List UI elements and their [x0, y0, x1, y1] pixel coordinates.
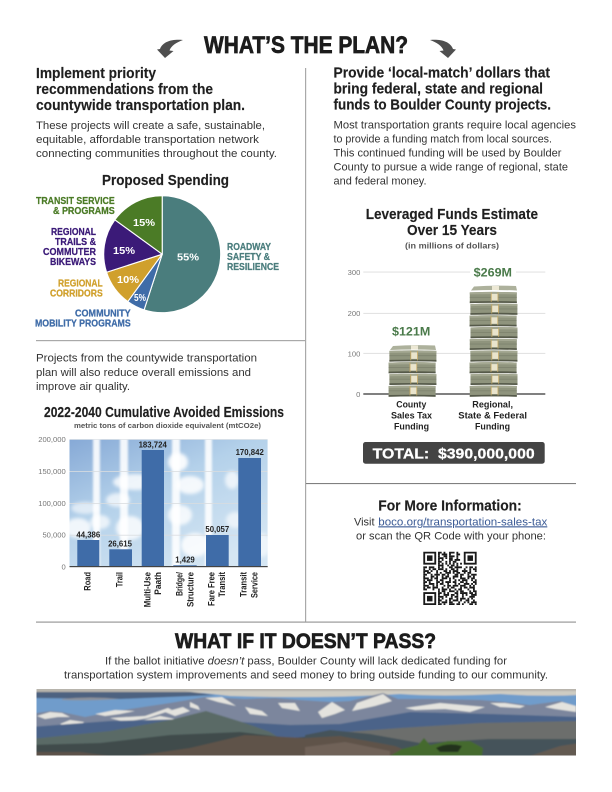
- x axis labels: Road: [83, 572, 93, 591]
- y axis labels: 100: [348, 349, 360, 358]
- heading: provide local-match dollars: [334, 66, 551, 114]
- text block: projects description: These projects will create a safe, sustainable,: [36, 120, 265, 132]
- bar values: 1,429: [175, 556, 195, 565]
- text block: grants description: Most transportation grants require local agencies: [334, 120, 576, 132]
- heading: provide local-match dollars: bring federal, state and regional: [334, 82, 543, 98]
- text block: grants description: to provide a funding match from local sources.: [334, 134, 552, 146]
- label: regional corridors: CORRIDORS: [50, 289, 103, 300]
- heading: proposed spending: Proposed Spending: [102, 173, 229, 189]
- total box: TOTAL: $390,000,000: [373, 446, 535, 462]
- pie chart: proposed spending: 55%: [177, 252, 200, 264]
- y axis labels: 50,000: [42, 531, 66, 540]
- title: WHAT’S THE PLAN?: [204, 32, 408, 59]
- label: community mobility: COMMUNITY: [75, 309, 131, 320]
- label: county sales tax funding: County: [396, 399, 427, 410]
- money stack: regional: [470, 286, 518, 397]
- y axis labels: 200: [348, 309, 360, 318]
- bar values: 44,386: [76, 530, 101, 539]
- text block: grants description: and federal money.: [334, 176, 426, 188]
- label: community mobility: MOBILITY PROGRAMS: [35, 319, 131, 330]
- label: regional trails: REGIONAL: [51, 227, 96, 238]
- y axis labels: 0: [61, 562, 66, 572]
- label: county sales tax funding: Funding: [394, 421, 429, 432]
- text block: consequence: [64, 656, 548, 682]
- text block: emissions description: Projects from the countywide transportation: [36, 353, 257, 365]
- text block: projects description: connecting communities throughout the county.: [36, 148, 277, 160]
- heading: cumulative avoided emissions: 2022-2040 Cumulative Avoided Emissions: [44, 405, 284, 421]
- label: regional state federal funding: Funding: [475, 421, 510, 432]
- label: roadway safety: RESILIENCE: [227, 262, 279, 273]
- grey-green peak: [30, 711, 290, 745]
- bars: [77, 450, 261, 567]
- bar values: 50,057: [205, 525, 229, 534]
- label: transit service: TRANSIT SERVICE: [36, 196, 115, 207]
- heading: leveraged funds estimate: Over 15 Years: [407, 223, 497, 239]
- text block: emissions description: [36, 353, 257, 393]
- y axis labels: 200,000: [38, 435, 66, 444]
- heading: leveraged funds estimate: [366, 207, 538, 251]
- panel: local-match dollars: [334, 66, 576, 464]
- text block: consequence: transportation system improvements and seed money to bring outside funding to our community.: [64, 670, 548, 682]
- slice: transit service 15%: [115, 196, 162, 254]
- slice: roadway safety 55%: [144, 196, 221, 313]
- panel: for more information: [354, 499, 548, 605]
- value: $121M: $121M: [392, 326, 430, 338]
- text block: grants description: [334, 120, 576, 188]
- text block: visit link: boco.org/transportation-sales-tax: [378, 516, 548, 528]
- text block: visit link: [354, 516, 548, 542]
- label: regional trails: BIKEWAYS: [50, 257, 96, 268]
- text block: grants description: County to pursue a wide range of regional, state: [334, 162, 568, 174]
- text block: consequence: If the ballot initiative doesn’t pass, Boulder County will lack dedicated funding for: [105, 656, 507, 668]
- slice: regional corridors 10%: [107, 254, 162, 302]
- total box: [363, 442, 545, 464]
- y axis labels: 0: [356, 390, 360, 399]
- section: what if it doesn't pass: [30, 630, 582, 760]
- heading: implement priority: Implement priority: [36, 66, 156, 82]
- y axis labels: 150,000: [38, 467, 66, 476]
- text block: visit link: Visit: [354, 516, 374, 528]
- bar values: 26,615: [108, 540, 133, 549]
- heading: implement priority: countywide transportation plan.: [36, 98, 245, 114]
- x axis labels: Transit: [239, 572, 249, 597]
- slice: community mobility 5%: [128, 254, 162, 310]
- heading: implement priority: recommendations from the: [36, 82, 213, 98]
- text block: grants description: This continued funding will be used by Boulder: [334, 148, 562, 160]
- label: transit service: [36, 196, 115, 217]
- value: $269M: $269M: [474, 267, 512, 279]
- panel: avoided emissions: [36, 353, 284, 607]
- pie chart: proposed spending: 15%: [133, 217, 156, 229]
- x axis labels: Transit: [217, 572, 227, 597]
- photo: mountain panorama: [36, 689, 576, 756]
- subheading: metric tons: metric tons of carbon dioxide equivalent (mtCO2e): [74, 421, 262, 430]
- label: regional state federal funding: State & Federal: [458, 410, 527, 421]
- x axis labels: Fare Free: [206, 572, 216, 606]
- label: regional trails: [43, 227, 96, 268]
- text block: emissions description: plan will also reduce overall emissions and: [36, 367, 251, 379]
- x axis labels: Paath: [153, 572, 163, 595]
- text block: projects description: equitable, affordable transportation network: [36, 134, 260, 146]
- chart: leveraged funds money stacks: [348, 265, 545, 432]
- pie chart: proposed spending: 5%: [134, 292, 147, 304]
- bar chart: avoided emissions: [38, 432, 270, 607]
- label: regional trails: COMMUTER: [43, 247, 96, 258]
- heading: provide local-match dollars: funds to Boulder County projects.: [334, 98, 551, 114]
- bar values: 183,724: [139, 440, 167, 449]
- x axis labels: Bridge/: [175, 572, 185, 596]
- x axis labels: Service: [249, 572, 259, 598]
- heading: implement priority: [36, 66, 245, 114]
- x axis labels: Multi-Use: [143, 572, 153, 607]
- value: $269M: [470, 265, 516, 279]
- label: county sales tax funding: Sales Tax: [391, 410, 433, 421]
- label: roadway safety: [227, 242, 279, 273]
- panel dividers: [36, 68, 576, 623]
- label: county sales tax funding: [391, 399, 433, 432]
- dark foothills: [36, 732, 306, 756]
- money stack: county: [389, 345, 436, 397]
- label: regional corridors: REGIONAL: [58, 279, 103, 290]
- far hills right: [350, 720, 576, 744]
- pie chart: proposed spending: 10%: [117, 274, 140, 286]
- header: what's the plan: [157, 32, 456, 59]
- icon: right curved arrow: [430, 40, 456, 58]
- x axis labels: Structure: [185, 572, 195, 607]
- text block: emissions description: improve air quality.: [36, 381, 130, 393]
- text block: projects description: [36, 120, 277, 160]
- heading: for more information: For More Information:: [378, 499, 522, 515]
- icon: QR code: [423, 552, 477, 605]
- text block: visit link: or scan the QR Code with your phone:: [356, 530, 546, 542]
- heading: provide local-match dollars: Provide ‘local-match’ dollars that: [334, 66, 550, 82]
- tree: [390, 738, 483, 756]
- slice: regional trails 15%: [104, 220, 162, 272]
- label: transit service: & PROGRAMS: [53, 206, 115, 217]
- icon: left curved arrow: [157, 40, 183, 58]
- snow range base: [36, 692, 576, 728]
- heading: leveraged funds estimate: (in millions of dollars): [405, 242, 499, 251]
- chart background: sky: [70, 439, 268, 566]
- label: regional state federal funding: [458, 399, 527, 432]
- label: community mobility: [35, 309, 131, 330]
- x axis labels: Trail: [115, 572, 125, 587]
- bar values: 170,842: [236, 448, 264, 457]
- title: what if it doesn't pass: WHAT IF IT DOESN’T PASS?: [175, 630, 436, 653]
- brown slopes: [135, 735, 420, 756]
- y axis labels: [348, 268, 360, 399]
- blue ridge: [36, 712, 576, 740]
- label: roadway safety: SAFETY &: [227, 252, 270, 263]
- label: regional state federal funding: Regional,: [472, 399, 513, 410]
- x axis labels: [83, 572, 259, 607]
- bar values: [76, 440, 264, 565]
- y axis labels: [38, 435, 66, 572]
- pie chart: proposed spending: [104, 196, 221, 313]
- panel: implement priority recommendations: [35, 66, 279, 330]
- y axis labels: 100,000: [38, 499, 66, 508]
- label: regional trails: TRAILS &: [55, 237, 96, 248]
- label: roadway safety: ROADWAY: [227, 242, 271, 253]
- y axis labels: 300: [348, 268, 360, 277]
- pie chart: proposed spending: 15%: [113, 245, 136, 257]
- label: regional corridors: [50, 279, 103, 300]
- heading: leveraged funds estimate: Leveraged Funds Estimate: [366, 207, 538, 223]
